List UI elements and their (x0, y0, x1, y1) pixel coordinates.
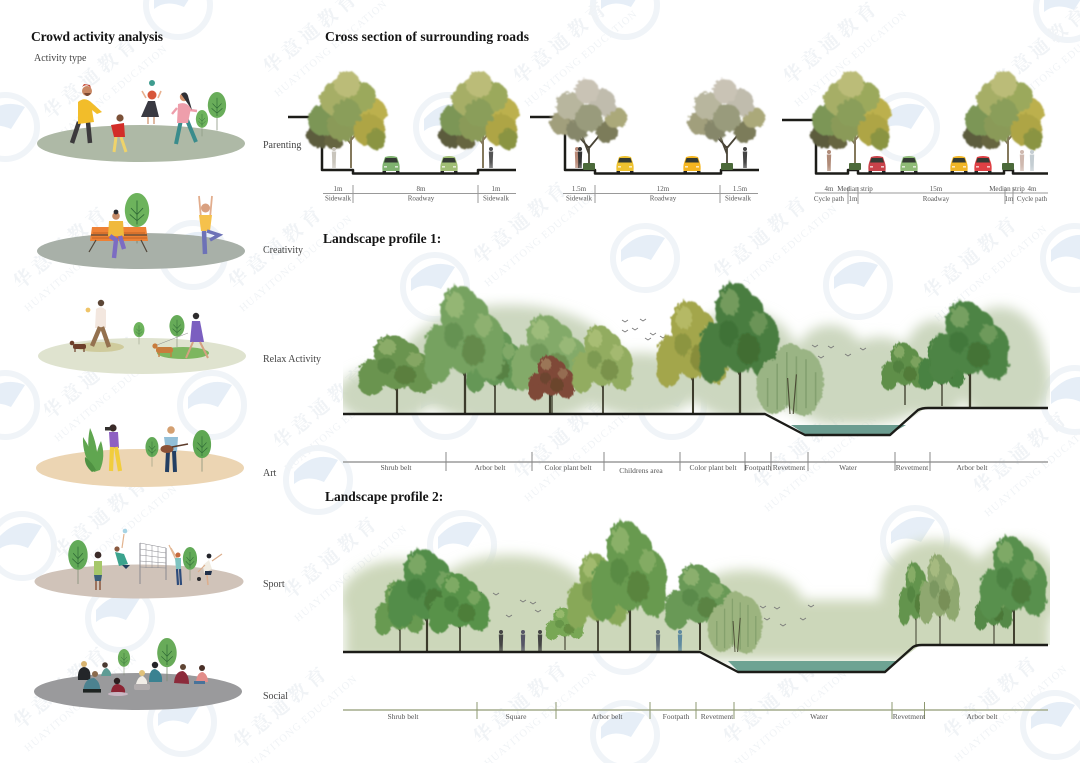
dimensions: 4m (825, 185, 834, 193)
zone scale: Revetment (773, 463, 806, 472)
icon: tree right (193, 430, 211, 472)
dimensions: Sidewalk (566, 194, 593, 202)
icon: sun (86, 308, 90, 312)
zone scale: Revetment (893, 712, 926, 721)
zone scale: Revetment (896, 463, 929, 472)
street trees (307, 71, 519, 168)
figure: yoga woman (199, 196, 219, 254)
hazy background trees (340, 540, 1060, 660)
dimensions: 1.5m (733, 185, 748, 193)
zone scale: Arbor belt (474, 463, 506, 472)
landscape profile 1 (337, 283, 1050, 475)
dimensions: Roadway (650, 194, 677, 202)
label: art: Art (263, 468, 277, 479)
icon: tree left (68, 540, 88, 584)
dimensions: Roadway (923, 195, 950, 203)
dimensions (814, 185, 1048, 204)
street trees (811, 71, 1044, 168)
label: relax activity: Relax Activity (263, 354, 321, 365)
zone scale: Shrub belt (380, 463, 412, 472)
planters (849, 163, 1014, 170)
panel: creativity activity (37, 193, 303, 269)
dimensions: 1m (334, 185, 343, 193)
ground line (343, 408, 1048, 435)
bird flocks (622, 318, 866, 358)
figure: guitarist (160, 426, 188, 472)
dimensions: Sidewalk (725, 194, 752, 202)
hazy background trees (337, 305, 1050, 425)
figure: woman with dog (186, 313, 208, 358)
icon: tree small (196, 110, 208, 136)
icon: tree small (134, 322, 144, 344)
figure: man walking (92, 300, 109, 347)
dimensions: 1.5m (572, 185, 587, 193)
dimensions: Sidewalk (483, 194, 510, 202)
dimensions (563, 185, 758, 203)
people on path (499, 630, 682, 651)
pedestrians (827, 150, 1034, 171)
icon: tree large (208, 92, 226, 130)
panel: sport activity (34, 529, 285, 598)
figure: jumping player and ball (114, 529, 130, 569)
dimensions: 4m (1028, 185, 1037, 193)
figure: net player (169, 545, 181, 585)
panel: relax activity (38, 300, 321, 374)
planters (583, 163, 733, 170)
dimensions: 15m (930, 185, 943, 193)
figure: father (72, 84, 102, 143)
icon: tree large (157, 638, 177, 681)
ground line (343, 645, 1048, 672)
heading: cross section of surrounding roads: Cross section of surrounding roads (325, 29, 529, 44)
icon: volleyball net (140, 543, 166, 584)
trees (358, 283, 1009, 415)
label: social: Social (263, 691, 288, 702)
figure: mother (172, 92, 197, 144)
zone scale: Arbor belt (591, 712, 623, 721)
icon: tree (125, 193, 149, 243)
zone scale: Arbor belt (956, 463, 988, 472)
water (728, 661, 897, 671)
pedestrians (575, 147, 747, 168)
dimensions: Cycle path (814, 195, 845, 203)
figure: reading woman (108, 210, 124, 258)
zone scale: Footpath (663, 712, 690, 721)
heading: landscape profile 1: Landscape profile 1: (323, 231, 441, 246)
icon: tree small (118, 649, 130, 675)
panel: parenting activity (37, 80, 301, 162)
zone scale: Arbor belt (966, 712, 998, 721)
bird flocks (476, 592, 814, 626)
dimensions: 8m (417, 185, 426, 193)
dimensions: 1m (492, 185, 501, 193)
figure: kicker and ball (197, 554, 222, 585)
figure: photographer (105, 424, 120, 471)
cars (382, 156, 458, 173)
figure: child (111, 114, 126, 152)
heading: landscape profile 2: Landscape profile 2: (325, 489, 443, 504)
figure: dog orange (152, 333, 188, 357)
figure: jumping girl with ball (141, 80, 161, 124)
ground line (530, 117, 759, 174)
landscape profile 2 (340, 521, 1060, 721)
dimensions: Median strip (989, 185, 1025, 193)
text: activity type: Activity type (34, 53, 87, 64)
figure: dog brown (70, 341, 86, 352)
road section 3 (782, 71, 1048, 204)
dimensions: Median strip (837, 185, 873, 193)
zone scale (343, 452, 1048, 475)
panel: social activity (34, 638, 288, 710)
figure group: seated people (78, 661, 208, 696)
dimensions (323, 185, 516, 203)
cars (868, 156, 992, 173)
ground line (288, 117, 516, 174)
zone scale: Color plant belt (544, 463, 592, 472)
dimensions: 12m (657, 185, 670, 193)
road section 1 (288, 71, 519, 203)
icon: orange bench (89, 227, 148, 252)
dimensions: 1m (849, 195, 858, 203)
water (791, 425, 906, 434)
dimensions: Roadway (408, 194, 435, 202)
icon: tree small (146, 437, 158, 467)
label: sport: Sport (263, 579, 285, 590)
zone scale: Shrub belt (387, 712, 419, 721)
heading: crowd activity analysis: Crowd activity analysis (31, 29, 163, 44)
zone scale: Square (506, 712, 527, 721)
label: creativity: Creativity (263, 245, 303, 256)
zone scale (343, 702, 1048, 721)
dimensions: 1m (1005, 195, 1014, 203)
zone scale: Water (839, 463, 857, 472)
road section 2 (530, 79, 765, 203)
dimensions: Cycle path (1017, 195, 1048, 203)
label: parenting: Parenting (263, 140, 301, 151)
icon: tree right (183, 547, 197, 581)
icon: plant (83, 428, 103, 472)
cars (616, 156, 701, 173)
zone scale: Color plant belt (689, 463, 737, 472)
figure: standing kid (94, 552, 102, 590)
panel: art activity (36, 424, 277, 487)
pedestrians (332, 147, 493, 168)
street trees (550, 79, 765, 168)
ground line (782, 120, 1048, 174)
zone scale: Water (810, 712, 828, 721)
zone scale: Childrens area (619, 466, 663, 475)
trees (375, 521, 1047, 653)
dimensions: Sidewalk (325, 194, 352, 202)
zone scale: Revetment (701, 712, 734, 721)
zone scale: Footpath (745, 463, 772, 472)
icon: tree medium (169, 315, 185, 347)
